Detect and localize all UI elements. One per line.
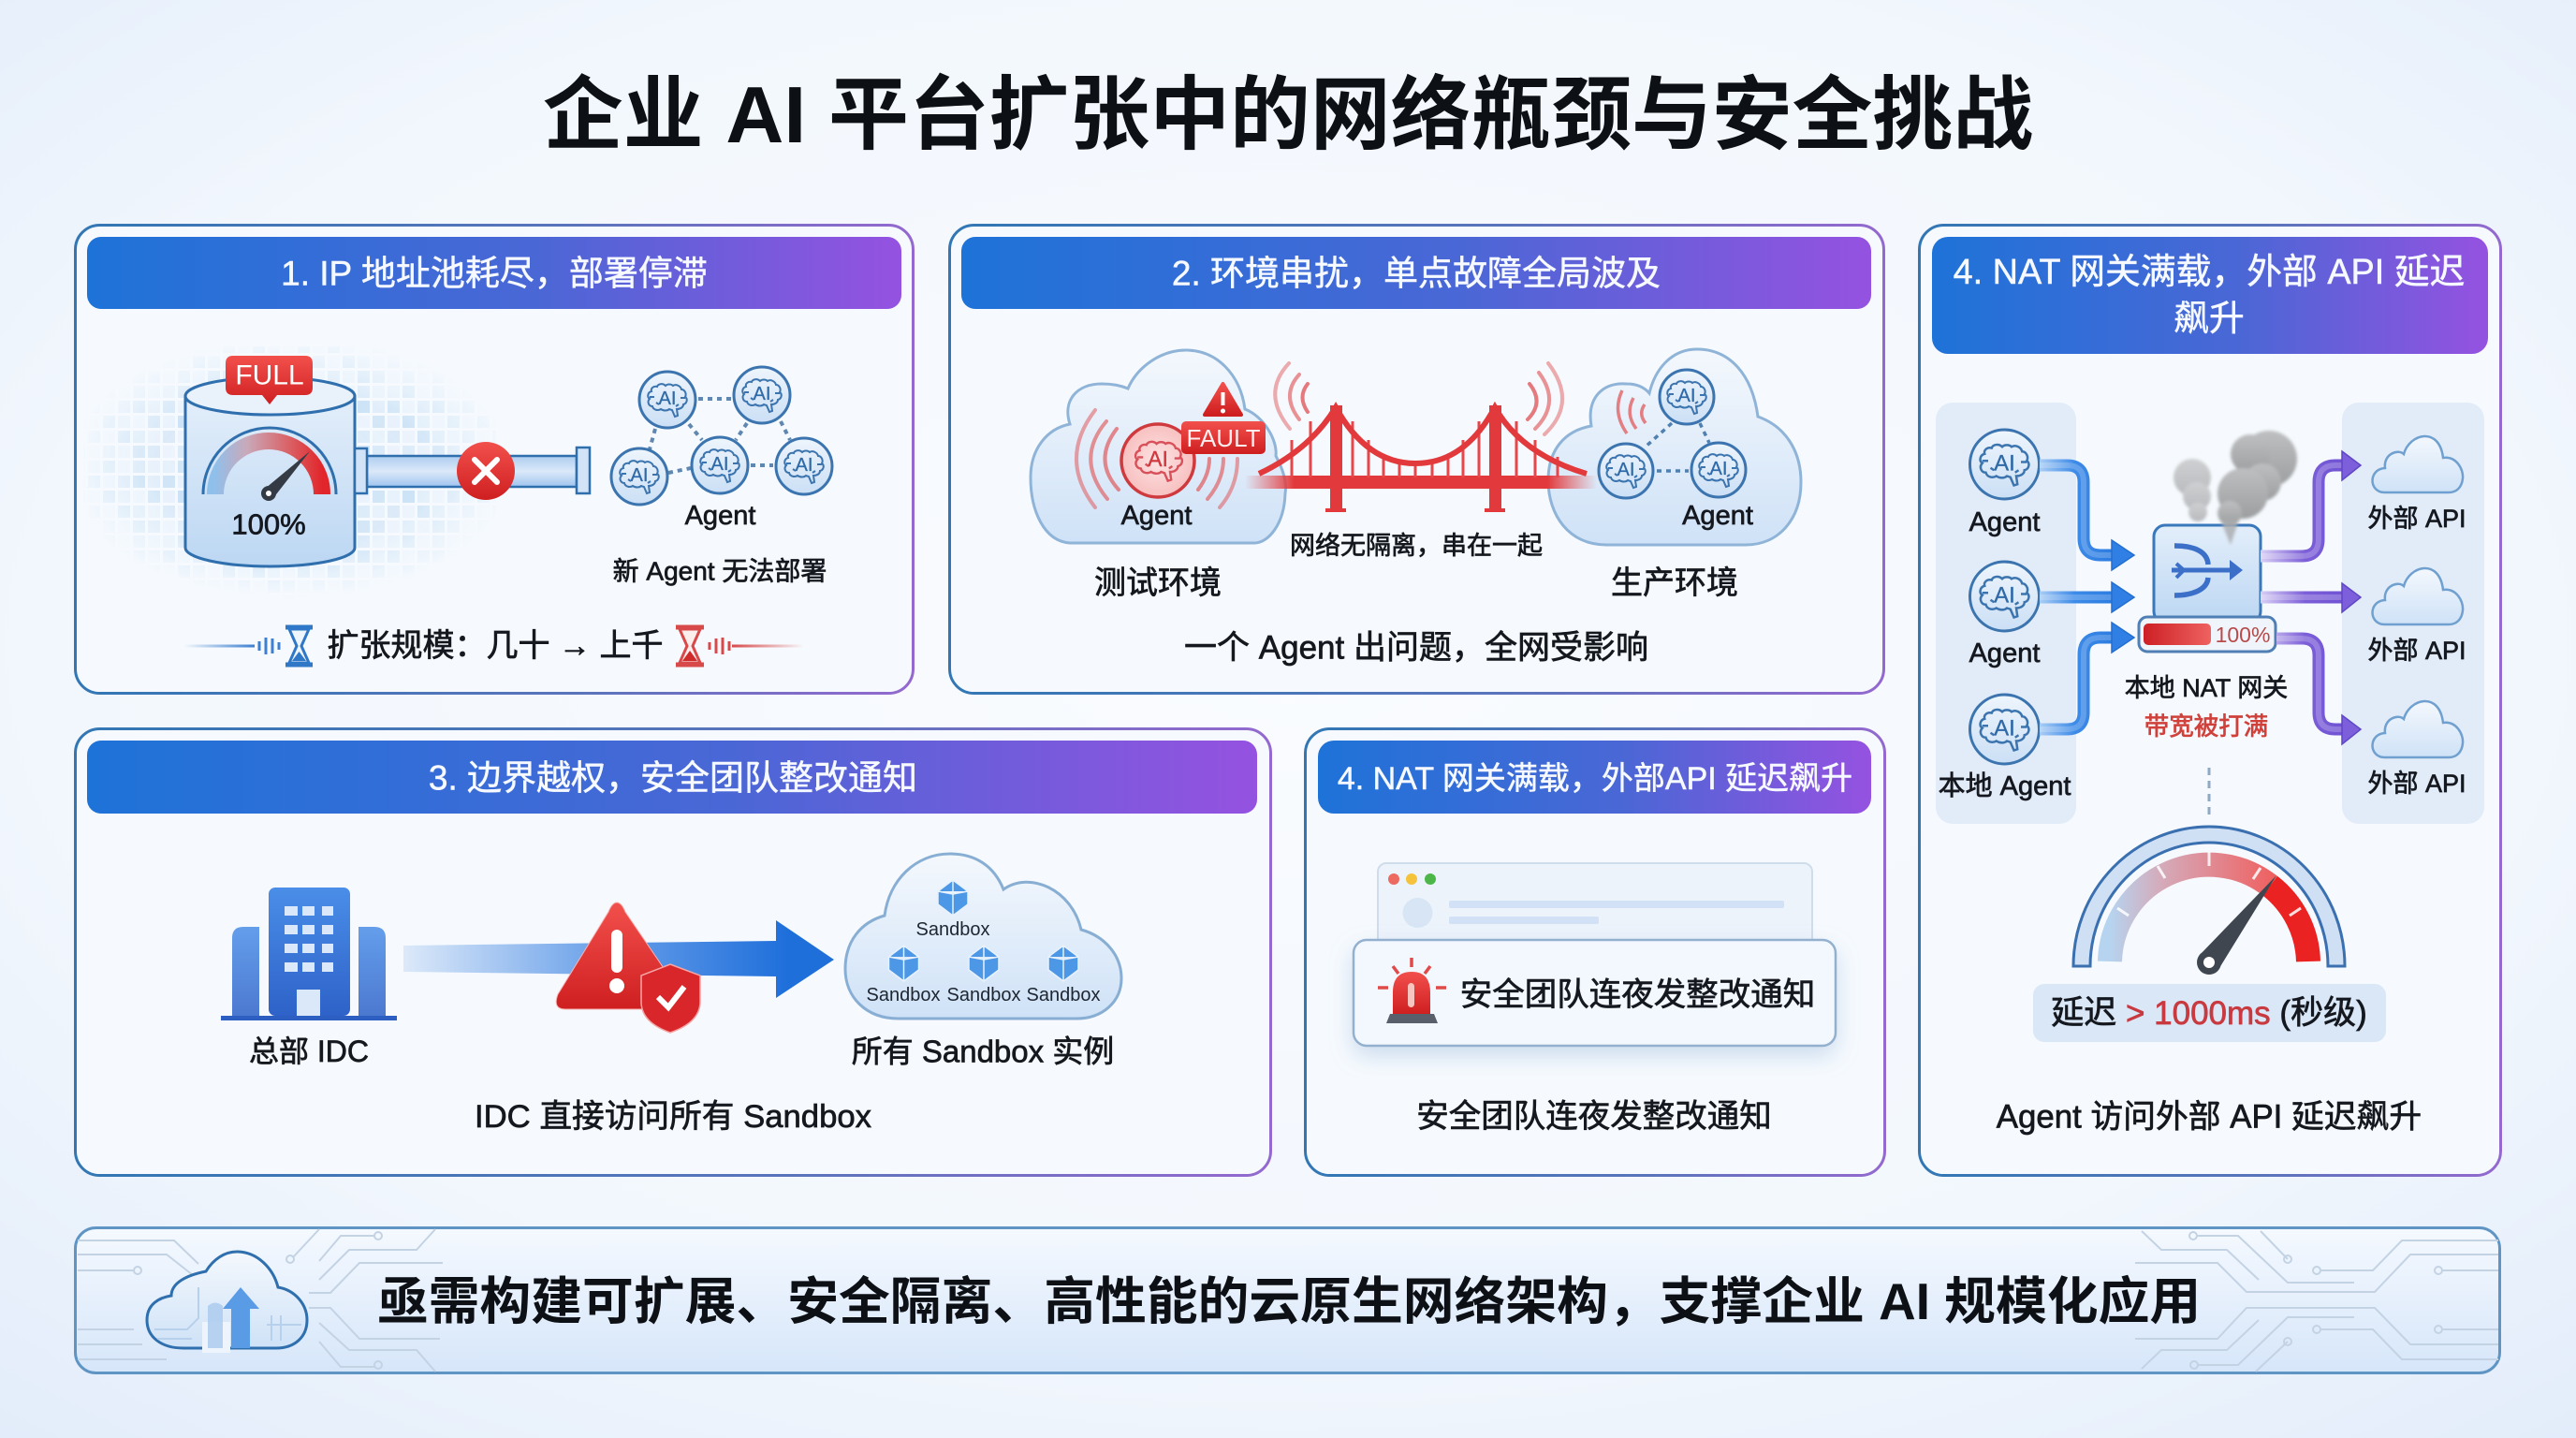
label: no isolation: 网络无隔离，串在一起 (1290, 532, 1543, 560)
column: external APIs (2342, 403, 2484, 824)
heading: panel 2 (961, 237, 1871, 309)
icon: warning triangle (1205, 384, 1241, 415)
icon: blue hourglass (183, 627, 313, 665)
column: agents: Agent (1969, 507, 2040, 537)
agent network: AI (631, 465, 648, 486)
label: Agent: Agent (685, 501, 755, 531)
icon: IP pool cylinder (185, 356, 355, 566)
arrow: IDC to sandbox (403, 920, 834, 998)
icon: red bridge (1245, 405, 1597, 512)
pixel map backdrop (84, 346, 496, 599)
sandbox cloud (845, 854, 1121, 1019)
icon: failing agent: AI (1148, 447, 1168, 471)
caption: panel 4 tall: Agent 访问外部 API 延迟飙升 (1997, 1099, 2422, 1135)
arrows: agents to gateway (2040, 465, 2134, 729)
mock window (1378, 863, 1812, 957)
heading: panel 3: 3. 边界越权，安全团队整改通知 (429, 758, 917, 798)
label: 100%: 100% (231, 507, 306, 541)
banner: conclusion (75, 1228, 2499, 1372)
tag: FULL (226, 356, 313, 404)
label: test environment: 测试环境 (1094, 565, 1222, 601)
callout: latency value (2033, 984, 2386, 1042)
icon: red hourglass (676, 627, 804, 665)
heading: panel 2: 2. 环境串扰，单点故障全局波及 (1172, 255, 1661, 292)
column: external APIs: 外部 API (2367, 505, 2466, 533)
agent network: AI (796, 455, 812, 476)
gauge: latency (2073, 827, 2345, 975)
sandbox cloud: Sandbox (867, 985, 940, 1005)
agent network: AI (754, 384, 770, 404)
heading: panel 4 tall: 飙升 (2174, 300, 2245, 339)
column: external APIs: 外部 API (2367, 637, 2466, 665)
label: HQ IDC: 总部 IDC (249, 1034, 369, 1068)
heading: panel 1 (87, 237, 901, 309)
label: new agent cannot deploy: 新 Agent 无法部署 (613, 556, 827, 586)
column: agents: AI (1994, 582, 2015, 609)
agent network: AI (659, 389, 676, 409)
sandbox cloud: Sandbox (947, 985, 1020, 1005)
title: 企业 AI 平台扩张中的网络瓶颈与安全挑战 (543, 70, 2033, 160)
sandbox cloud: Sandbox (916, 919, 989, 940)
icon: siren (1378, 958, 1446, 1023)
column: agents: AI (1994, 451, 2015, 476)
sandbox cubes (889, 880, 1078, 981)
test environment cloud (1031, 350, 1285, 543)
label: local NAT gateway: 本地 NAT 网关 (2125, 674, 2288, 702)
column: external APIs: 外部 API (2367, 770, 2466, 798)
icon: smoke (2174, 431, 2297, 545)
icon: blocked pipe (355, 442, 590, 500)
icon: cloud with up arrow (147, 1252, 307, 1353)
caption: panel 2: 一个 Agent 出问题，全网受影响 (1184, 629, 1648, 667)
tag: FAULT: FAULT (1187, 424, 1261, 452)
production environment cloud: AI (1710, 459, 1727, 479)
column: agents (1936, 403, 2076, 824)
production environment cloud (1548, 349, 1801, 545)
production environment cloud: AI (1617, 460, 1634, 480)
sandbox cloud: Sandbox (1027, 985, 1100, 1005)
label: all sandbox instances: 所有 Sandbox 实例 (852, 1034, 1114, 1069)
heading: panel 4 wide: 4. NAT 网关满载，外部API 延迟飙升 (1338, 761, 1852, 797)
label: Agent production: Agent (1682, 501, 1753, 531)
label: Agent test: Agent (1121, 501, 1192, 531)
agent network: AI (711, 454, 728, 475)
icon: warning with shield (556, 902, 700, 1033)
agent network (611, 367, 832, 505)
heading: panel 1: 1. IP 地址池耗尽，部署停滞 (281, 255, 708, 292)
text: conclusion: 亟需构建可扩展、安全隔离、高性能的云原生网络架构，支撑企业 AI 规模化应用 (377, 1272, 2201, 1330)
column: agents: Agent (1969, 638, 2040, 668)
heading: panel 4 tall: 4. NAT 网关满载，外部 API 延迟 (1954, 253, 2465, 292)
dashed connector (2207, 768, 2211, 816)
callout: latency value: 延迟 > 1000ms (秒级) (2051, 994, 2367, 1032)
heading: panel 4 tall (1932, 237, 2488, 354)
column: agents: AI (1994, 715, 2015, 741)
label: production environment: 生产环境 (1611, 565, 1738, 601)
caption: panel 3: IDC 直接访问所有 Sandbox (475, 1098, 871, 1135)
caption: panel 4 wide: 安全团队连夜发整改通知 (1416, 1099, 1772, 1135)
panel: boundary violation (75, 728, 1271, 1176)
text: scale: 扩张规模：几十 → 上千 (328, 628, 663, 664)
icon: HQ building (221, 888, 397, 1020)
progress bar: bandwidth 100% (2139, 617, 2276, 652)
column: agents: 本地 Agent (1939, 770, 2071, 801)
icon: failing agent (1121, 424, 1194, 497)
signal arcs (1275, 363, 1562, 434)
production environment cloud: AI (1678, 386, 1695, 406)
text: notification: 安全团队连夜发整改通知 (1460, 977, 1815, 1013)
notification card (1354, 940, 1836, 1046)
icon: NAT gateway (2154, 525, 2261, 623)
scale line with hourglasses (183, 627, 804, 665)
heading: panel 3 (87, 741, 1257, 814)
label: bandwidth saturated: 带宽被打满 (2144, 712, 2268, 741)
progress bar: bandwidth 100%: 100% (2216, 623, 2270, 647)
panel: security notice (1305, 728, 1885, 1176)
arrows: gateway to APIs (2261, 451, 2361, 744)
panel: IP address pool exhausted (75, 225, 914, 693)
tag: FULL: FULL (235, 360, 304, 391)
panel: environment crosstalk (949, 225, 1883, 693)
gauge: pool usage (203, 428, 336, 501)
heading: panel 4 wide (1318, 741, 1871, 814)
panel: NAT gateway overload tall (1919, 225, 2501, 1176)
